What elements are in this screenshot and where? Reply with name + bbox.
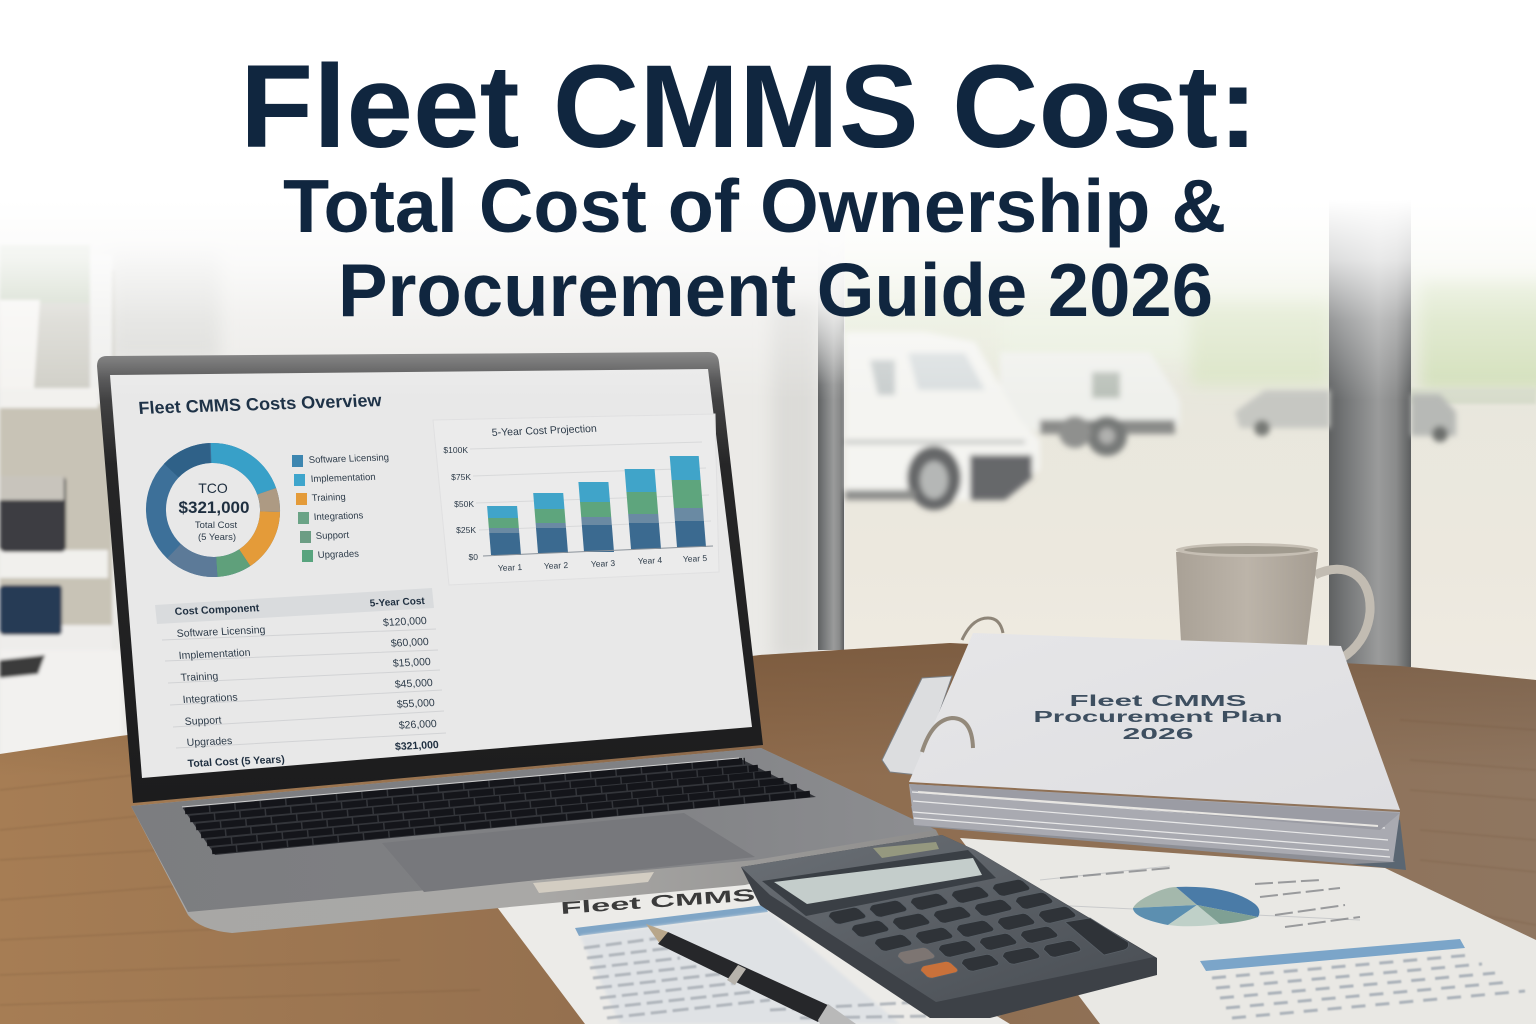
stacked bar chart: 5-year cost projection: $100K: [443, 445, 468, 455]
stacked bar chart: 5-year cost projection: Year 5: [683, 553, 708, 564]
cost breakdown table: $45,000: [394, 677, 433, 691]
donut legend: Integrations: [313, 510, 364, 523]
cost breakdown table: Support: [184, 714, 222, 728]
laptop keyboard: [182, 758, 816, 855]
coffee mug: [1176, 543, 1370, 660]
title: [240, 41, 1258, 332]
binder ring: back: [962, 618, 1003, 640]
wooden desk: [0, 643, 1536, 1024]
donut legend: Implementation: [310, 472, 376, 485]
binder pages: [909, 784, 1400, 864]
cost breakdown table: 5-Year Cost: [369, 596, 426, 609]
bookshelf with printer and storage: [0, 245, 122, 756]
stacked bar chart: 5-year cost projection: $0: [469, 552, 478, 562]
calculator: [741, 835, 1157, 1018]
donut legend: Software Licensing: [308, 452, 389, 466]
laptop lid: [97, 352, 763, 803]
paper: cost table sheet: Fleet CMMS: [560, 885, 756, 918]
donut chart: TCO: Total Cost: [195, 520, 237, 531]
cost breakdown table: $26,000: [398, 718, 437, 732]
title line 3: Procurement Guide 2026: [338, 248, 1213, 332]
cost breakdown table: Training: [180, 670, 219, 684]
cost breakdown table: Upgrades: [186, 735, 233, 749]
stacked bar chart: 5-year cost projection: Year 3: [591, 558, 616, 569]
cost breakdown table: Implementation: [178, 647, 251, 662]
laptop front notch: [533, 872, 654, 893]
binder title: 2026: [1122, 726, 1194, 743]
donut legend: Training: [311, 492, 346, 504]
donut legend: Upgrades: [317, 549, 360, 561]
window pillar: right: [1329, 195, 1411, 667]
laptop base and deck: [131, 748, 940, 933]
cost breakdown table: [155, 588, 446, 770]
binder cover: [909, 633, 1400, 810]
donut legend: Support: [315, 530, 350, 542]
calculator solar panel: [873, 842, 939, 858]
binder ring: front: [922, 718, 973, 752]
cost breakdown table: Integrations: [182, 692, 238, 706]
donut chart: TCO: $321,000: [179, 498, 249, 517]
cost breakdown table: $55,000: [396, 697, 435, 711]
cost breakdown table: $15,000: [392, 656, 431, 670]
stacked bar chart: 5-year cost projection: Year 1: [498, 562, 523, 573]
calculator display frame: [762, 850, 996, 916]
top white fade behind title: [0, 0, 1536, 400]
stacked bar chart: 5-year cost projection: [433, 414, 719, 585]
stacked bar chart: 5-year cost projection: Year 2: [544, 560, 569, 571]
paper: pie chart sheet: [960, 838, 1536, 1024]
cost breakdown table: Cost Component: [174, 602, 260, 618]
title line 2: Total Cost of Ownership &: [283, 164, 1226, 248]
laptop screen: [110, 369, 752, 778]
donut chart: TCO: TCO: [198, 480, 228, 496]
binder flap: [882, 676, 952, 775]
pie chart on paper: [1133, 887, 1259, 926]
procurement binder: [882, 618, 1406, 870]
calculator display: [774, 858, 982, 904]
cost breakdown table: Total Cost (5 Years): [187, 754, 285, 770]
blurred fleet trucks outside window: [845, 332, 1456, 510]
window pillar: left: [818, 195, 844, 650]
stacked bar chart: 5-year cost projection: $50K: [454, 499, 474, 509]
cost breakdown table: Software Licensing: [176, 624, 266, 640]
donut legend: [292, 452, 389, 562]
cost breakdown table: $60,000: [390, 636, 429, 650]
paper: cost table sheet: [497, 878, 1010, 1024]
stacked bar chart: 5-year cost projection: Year 4: [638, 555, 663, 566]
donut chart: TCO: [154, 452, 272, 568]
laptop trackpad: [382, 813, 755, 892]
binder title: Fleet CMMS: [1070, 693, 1247, 710]
stacked bar chart: 5-year cost projection: 5-Year Cost Projection: [491, 423, 597, 439]
binder title: Procurement Plan: [1034, 709, 1282, 726]
document papers on desk: [497, 838, 1536, 1024]
calculator keys: [829, 879, 1128, 978]
cost breakdown table: $321,000: [394, 739, 439, 753]
cost breakdown table: $120,000: [382, 615, 427, 629]
donut chart: TCO: (5 Years): [198, 532, 236, 543]
binder title: [1034, 693, 1282, 743]
pen: [646, 924, 856, 1024]
binder back cover: [1350, 815, 1406, 870]
stacked bar chart: 5-year cost projection: $25K: [456, 525, 476, 535]
stacked bar chart: 5-year cost projection: $75K: [451, 472, 471, 482]
laptop: [97, 352, 940, 933]
title line 1: Fleet CMMS Cost:: [240, 41, 1258, 173]
screen heading: Fleet CMMS Costs Overview: [138, 390, 383, 418]
